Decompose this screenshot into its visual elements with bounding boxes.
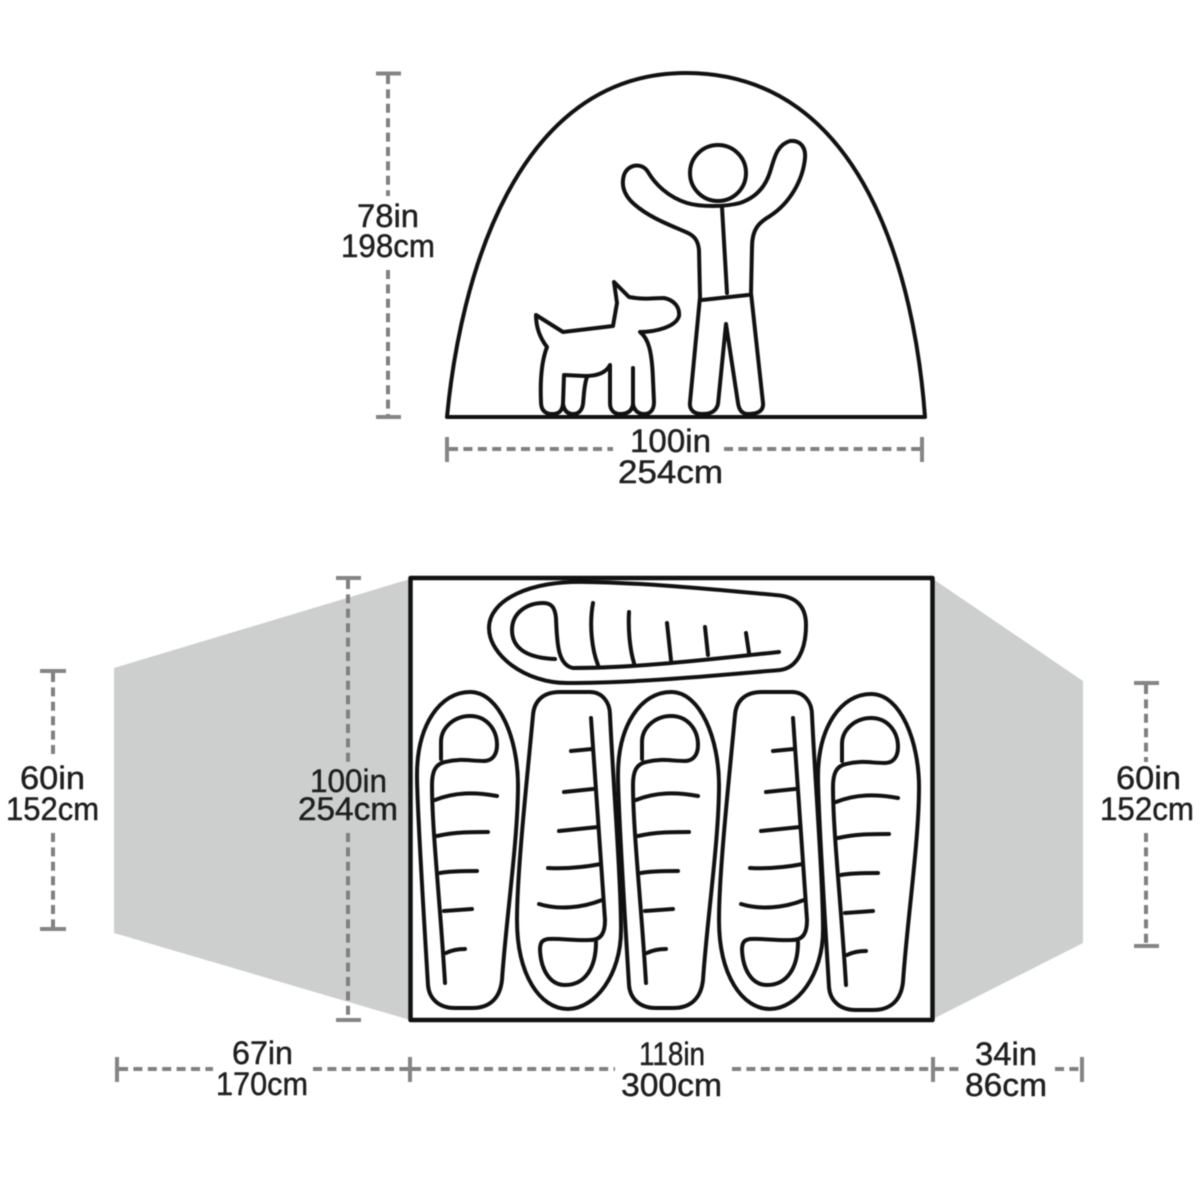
right vestibule (933, 579, 1083, 1019)
sleeping bag: head down 2 (719, 692, 823, 1009)
label: 100in 254cm: 254cm (618, 454, 723, 490)
label: 100in 254cm: 100in (630, 423, 711, 459)
dimension: right vestibule end 60in (1100, 683, 1194, 946)
sleeping bag: head up 3 (818, 694, 919, 1010)
dimension: floor depth 100in (298, 578, 398, 1020)
label: 60in 152cm right: 60in (1116, 760, 1181, 796)
dimension: right vestibule length 34in (933, 1036, 1082, 1103)
dimension: left vestibule length 67in (117, 1035, 410, 1102)
label: 67in 170cm: 67in (232, 1035, 293, 1071)
label: 60in 152cm left: 152cm (6, 791, 99, 827)
dimension: left vestibule end 60in (6, 671, 99, 929)
label: 67in 170cm (216, 1035, 308, 1102)
label: 34in 86cm: 34in (975, 1036, 1037, 1072)
label: 100in 254cm (618, 423, 723, 490)
icon: person with raised arms (623, 141, 805, 414)
label: 78in 198cm: 198cm (341, 228, 435, 264)
left vestibule (114, 579, 410, 1020)
label: 60in 152cm right: 152cm (1100, 791, 1194, 827)
dimension: height 78in (341, 74, 435, 417)
label: 34in 86cm: 86cm (965, 1067, 1047, 1103)
sleeping bag: head up 1 (417, 692, 518, 1008)
icon: dog (536, 282, 679, 414)
sleeping bag: head down 1 (517, 692, 621, 1009)
label: 118in 300cm (621, 1036, 722, 1103)
sleeping bag: horizontal top (489, 582, 806, 683)
label: 118in 300cm: 118in (639, 1036, 705, 1072)
label: 67in 170cm: 170cm (216, 1066, 308, 1102)
sleeping bag: head up 2 (618, 692, 719, 1008)
panel: side view (447, 73, 925, 417)
label: 100in 254cm floor (298, 763, 398, 827)
label: 78in 198cm: 78in (357, 198, 419, 234)
dimension: floor length 118in (412, 1036, 931, 1103)
label: 34in 86cm (965, 1036, 1047, 1103)
label: 60in 152cm left (6, 760, 99, 827)
tent floor (410, 578, 932, 1020)
label: 78in 198cm (341, 198, 435, 264)
label: 60in 152cm right (1100, 760, 1194, 827)
panel: floor plan (114, 578, 1083, 1020)
dimension: width 100in (447, 423, 922, 490)
label: 100in 254cm floor: 100in (310, 763, 387, 799)
label: 60in 152cm left: 60in (20, 760, 85, 796)
label: 100in 254cm floor: 254cm (298, 791, 398, 827)
label: 118in 300cm: 300cm (621, 1067, 722, 1103)
tent dome outline (447, 73, 925, 417)
